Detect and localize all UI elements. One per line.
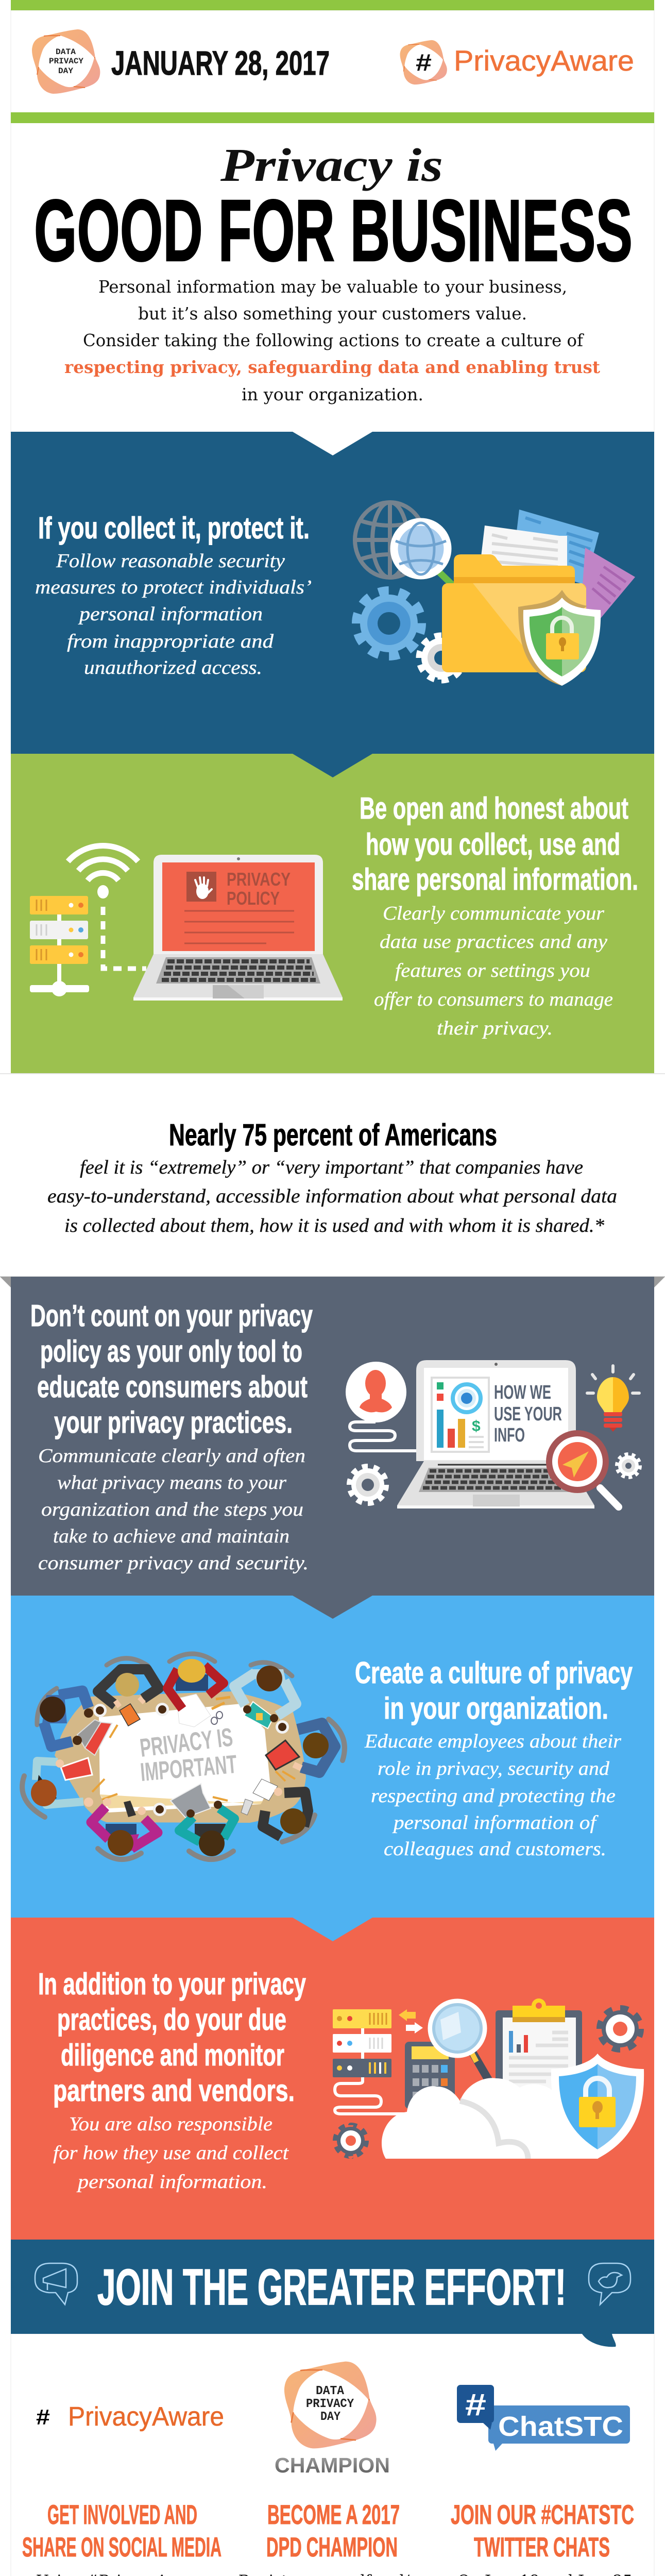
body: open and honest: Clearly communicate your [383, 903, 604, 924]
logo: champion: DATA [316, 2384, 345, 2398]
icon: laptop with privacy policy: POLICY [227, 888, 280, 909]
body: protect: unauthorized access. [84, 657, 262, 679]
column: social media [22, 2500, 221, 2576]
table text: privacy is important: IMPORTANT [139, 1750, 238, 1787]
panel: open and honest [11, 754, 654, 1073]
body: open and honest: data use practices and any [380, 931, 607, 953]
panel: protect [11, 432, 654, 754]
heading: culture [355, 1656, 633, 1725]
banner: join the greater effort [11, 2240, 654, 2347]
column: champion: DPD CHAMPION [266, 2532, 398, 2563]
column: champion [238, 2500, 426, 2576]
body: culture: personal information of [392, 1812, 599, 1834]
heading: open and honest [352, 791, 638, 896]
table text: privacy is important: PRIVACY IS [139, 1722, 234, 1762]
logo: data privacy day: PRIVACY [49, 57, 83, 66]
icon: laptop with privacy policy: PRIVACY [227, 869, 291, 890]
heading: partners [38, 1967, 306, 2108]
icon: servers, cloud and shield [333, 1998, 644, 2159]
logo: data privacy day: DATA [56, 47, 76, 57]
logo: privacy aware [400, 40, 634, 84]
logo: privacy aware: # [416, 49, 432, 76]
icon: light bulb [587, 1366, 639, 1432]
heading: partners: partners and vendors. [53, 2074, 295, 2108]
body: open and honest: features or settings you [395, 960, 590, 981]
body: statistic: easy-to-understand, accessible information about what personal data [47, 1185, 617, 1207]
icon: person and cable [346, 1362, 416, 1451]
logo: champion: CHAMPION [275, 2453, 390, 2477]
logo: data privacy day [32, 29, 100, 94]
person: top left [98, 1658, 159, 1705]
body: protect: measures to protect individuals’ [35, 577, 312, 598]
icon: laptop how we use your info: USE YOUR [494, 1403, 562, 1425]
heading: partners: In addition to your privacy [38, 1967, 306, 2001]
icon: bird bubble [589, 2263, 630, 2304]
body: protect: personal information [78, 603, 263, 625]
body: culture: colleagues and customers. [384, 1838, 606, 1860]
heading: statistic: Nearly 75 percent of Americans [169, 1118, 497, 1152]
body: protect: Follow reasonable security [56, 550, 285, 572]
body: statistic: feel it is “extremely” or “very important” that companies have [80, 1157, 583, 1178]
objects on table [61, 1694, 299, 1818]
body: privacy policy [38, 1445, 309, 1574]
intro paragraph [64, 277, 601, 404]
column: social media: SHARE ON SOCIAL MEDIA [22, 2532, 221, 2563]
body: partners: personal information. [76, 2171, 267, 2193]
logo: chatstc [457, 2385, 630, 2451]
logo: privacy aware wordmark: # [36, 2405, 50, 2429]
date: JANUARY 28, 2017 [111, 44, 330, 82]
logo: champion: PRIVACY [306, 2397, 354, 2411]
panel: statistic band [0, 1073, 665, 1287]
body: culture: respecting and protecting the [371, 1785, 616, 1807]
body: partners: You are also responsible [69, 2113, 272, 2135]
person: top right [234, 1663, 296, 1722]
person: left upper [37, 1688, 93, 1747]
body: open and honest: offer to consumers to manage [374, 989, 613, 1010]
intro paragraph: Personal information may be valuable to your business, [98, 277, 567, 297]
heading: protect: If you collect it, protect it. [38, 511, 310, 545]
illustration: meeting table [22, 1654, 345, 1859]
title: Privacy is [220, 139, 443, 191]
panel: culture of privacy [11, 1596, 654, 1918]
logo: chatstc: ChatSTC [498, 2411, 623, 2442]
logo: champion [275, 2362, 390, 2477]
body: privacy policy: take to achieve and maintain [53, 1526, 289, 1547]
table text: privacy is important [139, 1722, 238, 1787]
body: open and honest [374, 903, 613, 1039]
body: privacy policy: Communicate clearly and often [38, 1445, 305, 1467]
body: privacy policy: consumer privacy and security. [38, 1552, 309, 1574]
intro paragraph: in your organization. [242, 384, 423, 404]
intro paragraph: but it’s also something your customers value. [138, 303, 527, 324]
intro paragraph: Consider taking the following actions to create a culture of [83, 330, 585, 350]
body: privacy policy: what privacy means to your [57, 1472, 286, 1494]
person: right [294, 1719, 345, 1772]
person: bottom right [263, 1788, 315, 1842]
icon: wifi and servers [30, 845, 146, 996]
title [34, 139, 633, 280]
heading: partners: practices, do your due [57, 2003, 286, 2037]
person: bottom centre [179, 1801, 234, 1859]
body: culture: role in privacy, security and [378, 1758, 610, 1780]
body: culture [364, 1731, 621, 1860]
heading: privacy policy: policy as your only tool to [40, 1334, 302, 1368]
intro paragraph: respecting privacy, safeguarding data and enabling trust [64, 357, 601, 377]
body: protect: from inappropriate and [67, 631, 274, 652]
person: bottom left [91, 1798, 158, 1859]
logo: chatstc: # [465, 2387, 486, 2422]
person: top centre [167, 1654, 224, 1709]
body: statistic: is collected about them, how it is used and with whom it is shared.* [64, 1215, 604, 1236]
table top [55, 1691, 306, 1823]
column: twitter chats [450, 2500, 640, 2576]
icon: laptop how we use your info: $ [472, 1418, 481, 1435]
icon: laptop how we use your info: HOW WE [494, 1382, 551, 1403]
column: social media: GET INVOLVED AND [47, 2500, 197, 2530]
body: privacy policy: organization and the steps you [41, 1499, 303, 1520]
body: partners [53, 2113, 289, 2193]
logo: champion: DAY [320, 2410, 341, 2424]
icon: gears [350, 1454, 640, 1503]
body: statistic [47, 1157, 617, 1236]
column: champion: BECOME A 2017 [267, 2500, 400, 2530]
heading: privacy policy: your privacy practices. [54, 1405, 293, 1439]
heading: privacy policy [30, 1299, 313, 1439]
heading: partners: diligence and monitor [61, 2038, 284, 2072]
heading: privacy policy: Don’t count on your privacy [30, 1299, 313, 1333]
icon: laptop how we use your info: INFO [494, 1425, 525, 1446]
icon: folder, globe, gears and shield [355, 502, 635, 686]
header band [11, 0, 654, 123]
body: partners: for how they use and collect [53, 2142, 289, 2164]
panel: privacy policy [11, 1277, 654, 1596]
icon: magnifier with paper plane [546, 1430, 619, 1507]
person: left lower [22, 1759, 93, 1817]
icon: megaphone bubble [35, 2263, 77, 2304]
panel: partners and vendors [11, 1918, 654, 2240]
logo: data privacy day: DAY [58, 66, 73, 76]
logo: privacy aware: PrivacyAware [454, 44, 634, 77]
icon: laptop how we use your info [397, 1360, 594, 1509]
body: open and honest: their privacy. [437, 1018, 553, 1039]
logo: privacy aware wordmark: PrivacyAware [68, 2402, 224, 2432]
body: culture: Educate employees about their [364, 1731, 621, 1752]
icon: laptop with privacy policy [133, 855, 343, 1001]
heading: privacy policy: educate consumers about [37, 1370, 308, 1404]
body: protect [35, 550, 312, 679]
